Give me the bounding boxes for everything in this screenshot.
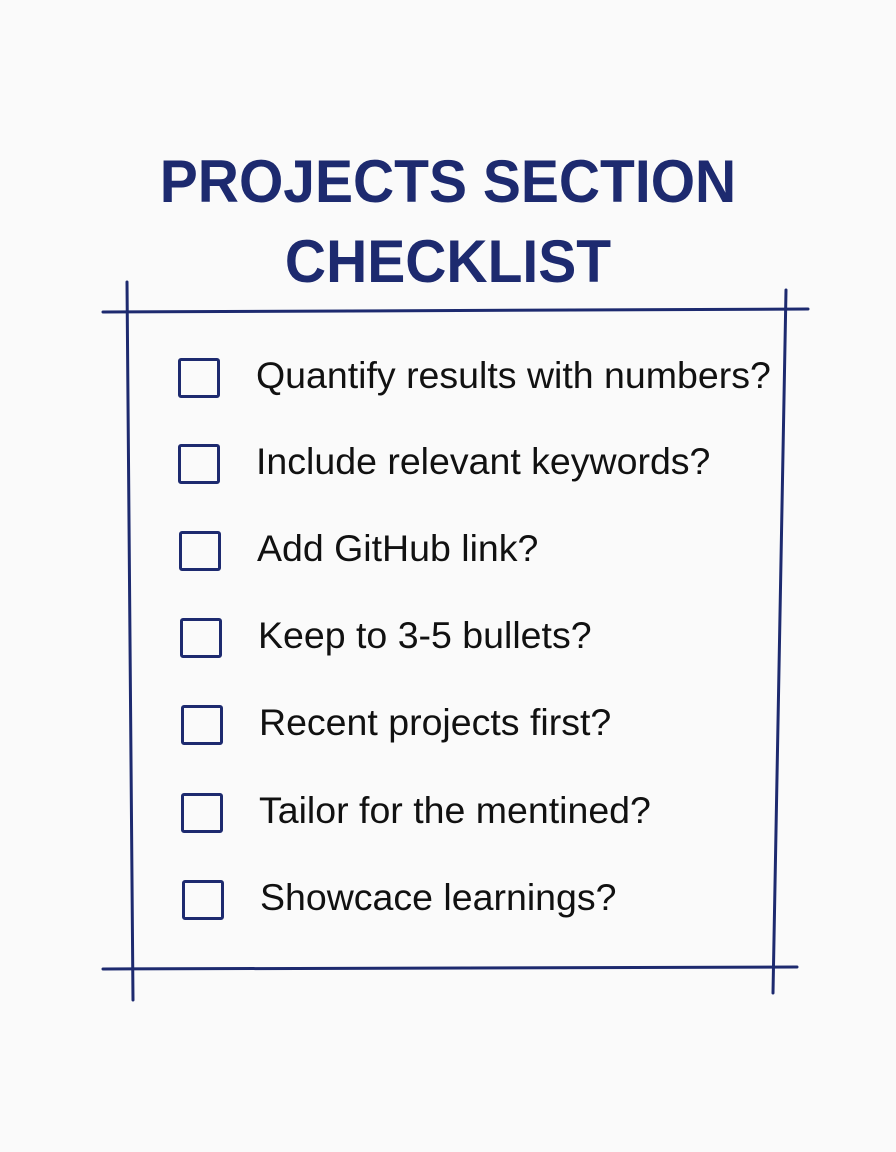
item 6: Tailor for the mentined? [259, 789, 651, 831]
item 1: Quantify results with numbers? [256, 354, 771, 396]
item 5: Recent projects first? [259, 701, 611, 743]
checklist [178, 354, 771, 920]
title: CHECKLIST [285, 228, 611, 296]
title [160, 149, 736, 296]
item 7: Showcace learnings? [260, 876, 616, 918]
item 2: Include relevant keywords? [256, 440, 710, 482]
item 3: Add GitHub link? [257, 527, 538, 569]
item 4: Keep to 3-5 bullets? [258, 614, 592, 656]
title: PROJECTS SECTION [160, 149, 736, 216]
